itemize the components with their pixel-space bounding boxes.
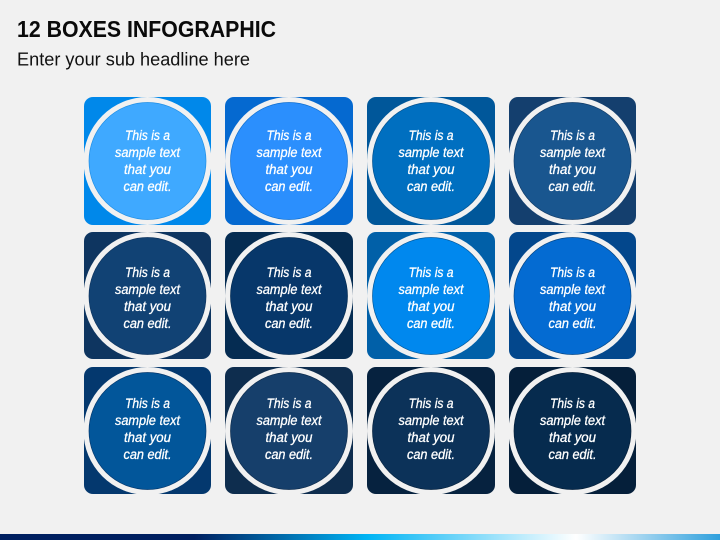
box 10 text: This is a — [266, 396, 312, 411]
box 7 text: This is a — [408, 265, 454, 280]
box 9 text: that you — [124, 430, 171, 445]
box 2 text: This is a — [266, 128, 312, 143]
box 2 circle — [230, 102, 348, 220]
box 7 text: can edit. — [407, 316, 455, 331]
box 10 — [225, 367, 353, 495]
box 8 text: sample text — [540, 282, 606, 297]
box 2 text: can edit. — [265, 179, 313, 194]
box 5 circle — [89, 238, 206, 354]
box 8 circle — [514, 238, 631, 354]
box 12 — [508, 367, 636, 495]
box 12 text: This is a — [550, 396, 595, 411]
box 1 ring — [84, 97, 212, 225]
box 9 ring — [84, 367, 212, 495]
box 8 — [508, 232, 636, 360]
box 8 text: that you — [549, 299, 596, 314]
box 6 — [225, 232, 353, 360]
box 5 background — [84, 232, 211, 359]
box 11 text: that you — [408, 430, 455, 445]
box 11 — [367, 367, 495, 495]
box 4 text: sample text — [540, 145, 606, 160]
box 5 — [84, 232, 212, 360]
box 4 text: This is a — [550, 128, 595, 143]
box 11 circle — [372, 372, 490, 490]
box 2 text: that you — [266, 162, 313, 177]
box 4 circle — [514, 102, 631, 220]
box 12 background — [509, 367, 636, 494]
box 3 — [367, 97, 495, 225]
box 5 ring — [84, 232, 212, 360]
box 7 text: sample text — [398, 282, 465, 297]
box 9 text: This is a — [125, 396, 170, 411]
box 6 background — [225, 232, 353, 359]
box 12 text: that you — [549, 430, 596, 445]
box 12 circle — [514, 372, 631, 490]
box 6 text: sample text — [256, 282, 323, 297]
box 8 text: can edit. — [548, 316, 596, 331]
box 7 text: that you — [408, 299, 455, 314]
box 4 background — [509, 97, 636, 225]
box 9 circle — [89, 372, 206, 490]
box 4 — [508, 97, 636, 225]
box 9 text: sample text — [115, 413, 181, 428]
box 12 ring — [508, 367, 636, 495]
box 11 text: sample text — [398, 413, 465, 428]
box 10 text: can edit. — [265, 447, 313, 462]
box 4 ring — [508, 97, 636, 225]
box 10 circle — [230, 372, 348, 490]
box 6 text: can edit. — [265, 316, 313, 331]
box 1 text: sample text — [115, 145, 181, 160]
box 11 background — [367, 367, 495, 494]
box 6 text: This is a — [266, 265, 312, 280]
box 5 text: can edit. — [124, 316, 172, 331]
box 8 ring — [508, 232, 636, 360]
box 6 ring — [225, 232, 353, 360]
bottom gradient bar — [0, 534, 720, 540]
box 3 text: This is a — [408, 128, 454, 143]
box 8 background — [509, 232, 636, 359]
box 7 background — [367, 232, 495, 359]
box 10 text: sample text — [256, 413, 323, 428]
box 2 text: sample text — [256, 145, 323, 160]
box 6 circle — [230, 238, 348, 354]
box 1 — [84, 97, 212, 225]
box 5 text: This is a — [125, 265, 170, 280]
box 3 text: sample text — [398, 145, 465, 160]
box 11 text: can edit. — [407, 447, 455, 462]
box 1 text: This is a — [125, 128, 170, 143]
box 10 background — [225, 367, 353, 494]
box 2 — [225, 97, 353, 225]
box 7 circle — [372, 238, 490, 354]
box 11 ring — [367, 367, 495, 495]
box 3 background — [367, 97, 495, 225]
box 3 text: can edit. — [407, 179, 455, 194]
box 4 text: that you — [549, 162, 596, 177]
box 5 text: sample text — [115, 282, 181, 297]
box 9 background — [84, 367, 211, 494]
box 12 text: sample text — [540, 413, 606, 428]
box 9 text: can edit. — [124, 447, 172, 462]
box 10 text: that you — [266, 430, 313, 445]
box 7 — [367, 232, 495, 360]
box 1 circle — [89, 102, 206, 220]
box 1 text: that you — [124, 162, 171, 177]
sub headline: Enter your sub headline here — [17, 50, 250, 70]
box 11 text: This is a — [408, 396, 454, 411]
box 3 circle — [372, 102, 490, 220]
box 1 background — [84, 97, 211, 225]
box 12 text: can edit. — [548, 447, 596, 462]
box 10 ring — [225, 367, 353, 495]
box 6 text: that you — [266, 299, 313, 314]
box 3 text: that you — [408, 162, 455, 177]
box 5 text: that you — [124, 299, 171, 314]
box 3 ring — [367, 97, 495, 225]
box 2 ring — [225, 97, 353, 225]
box 8 text: This is a — [550, 265, 595, 280]
title: 12 BOXES INFOGRAPHIC — [17, 16, 276, 42]
box 7 ring — [367, 232, 495, 360]
box 4 text: can edit. — [548, 179, 596, 194]
box 9 — [84, 367, 212, 495]
box 2 background — [225, 97, 353, 225]
box 1 text: can edit. — [124, 179, 172, 194]
